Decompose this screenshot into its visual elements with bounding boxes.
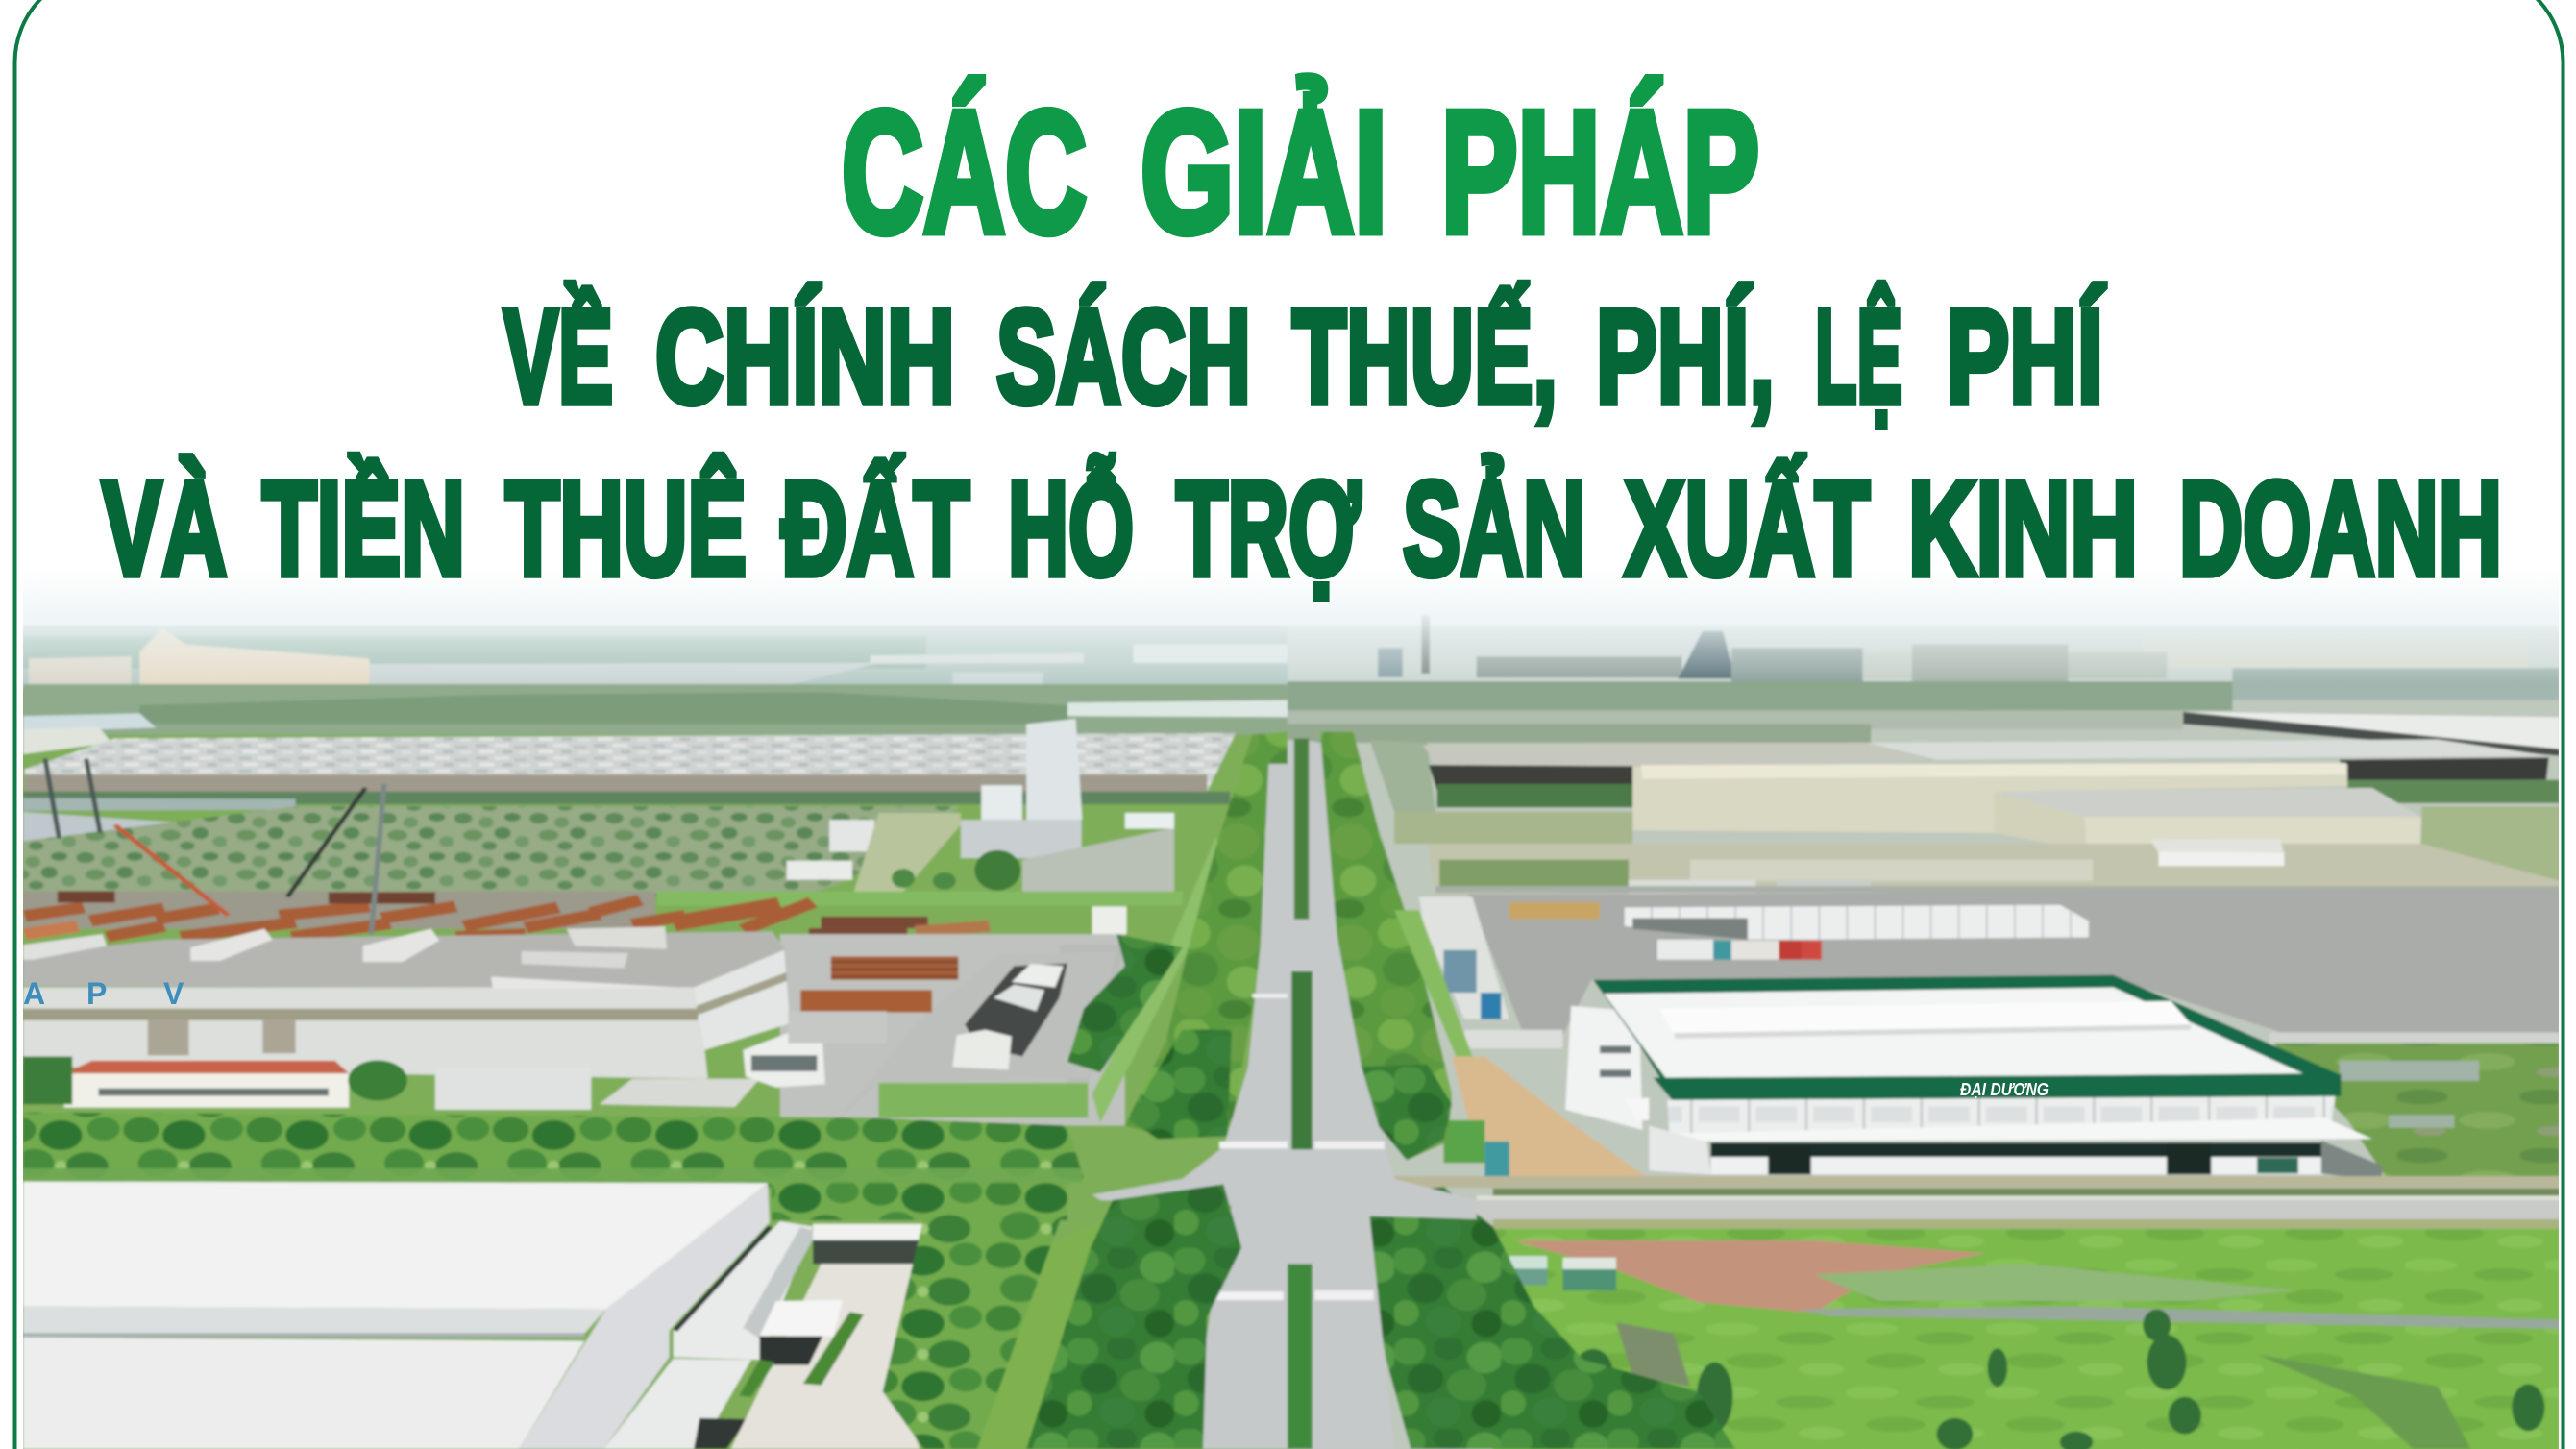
title line 3: VÀ TIỀN THUÊ ĐẤT HỖ TRỢ SẢN XUẤT KINH DOANH: ĐẤT (781, 454, 969, 603)
road (1092, 764, 1288, 1449)
haze fade into white header (23, 613, 2559, 677)
title line 2: VỀ CHÍNH SÁCH THUẾ, PHÍ, LỆ PHÍ: VỀ (503, 282, 613, 431)
title line 2: VỀ CHÍNH SÁCH THUẾ, PHÍ, LỆ PHÍ: CHÍNH (655, 282, 955, 431)
title line 2: VỀ CHÍNH SÁCH THUẾ, PHÍ, LỆ PHÍ (503, 282, 2105, 431)
far dark warehouses (1423, 712, 2560, 807)
photo right half: plants, yard and warehouse (1288, 615, 2576, 1449)
photo left half: factories, pipe yard and boulevard (0, 626, 1288, 1449)
stacked white containers (1625, 905, 2089, 960)
title line 3: VÀ TIỀN THUÊ ĐẤT HỖ TRỢ SẢN XUẤT KINH DOANH: KINH (1908, 454, 2138, 603)
title line 3: VÀ TIỀN THUÊ ĐẤT HỖ TRỢ SẢN XUẤT KINH DOANH (102, 454, 2502, 603)
title line 1: CÁC GIẢI PHÁP: GIẢI (1141, 76, 1387, 269)
title line 2: VỀ CHÍNH SÁCH THUẾ, PHÍ, LỆ PHÍ: SÁCH (996, 282, 1251, 431)
aerial photo of industrial park (0, 567, 2576, 1449)
title line 2: VỀ CHÍNH SÁCH THUẾ, PHÍ, LỆ PHÍ: PHÍ, (1596, 282, 1775, 431)
warehouse with green fascia (1565, 975, 2382, 1182)
green strip and trees along boulevard (1092, 839, 1232, 1123)
pipe stacks (25, 896, 990, 944)
striped canopy (600, 1079, 760, 1107)
warehouse brand name: ĐẠI DƯƠNG (1960, 1080, 2049, 1099)
title block (102, 76, 2502, 603)
distant steel plant (1378, 615, 2560, 700)
APV factory building (23, 926, 790, 1079)
title line 1: CÁC GIẢI PHÁP: PHÁP (1441, 76, 1759, 269)
horizontal access road (1477, 1200, 2560, 1219)
factory wall lettering: P (86, 976, 107, 1011)
scattered young trees (1574, 1309, 2544, 1449)
title line 3: VÀ TIỀN THUÊ ĐẤT HỖ TRỢ SẢN XUẤT KINH DOANH: XUẤT (1625, 454, 1870, 603)
grass field and pond (1493, 1229, 2560, 1449)
title line 3: VÀ TIỀN THUÊ ĐẤT HỖ TRỢ SẢN XUẤT KINH DOANH: TRỢ (1176, 454, 1361, 603)
title line 1: CÁC GIẢI PHÁP (842, 76, 1759, 269)
palm and tree rows (23, 1113, 1084, 1190)
title line 2: VỀ CHÍNH SÁCH THUẾ, PHÍ, LỆ PHÍ: LỆ (1815, 282, 1902, 431)
big white warehouse (23, 1182, 817, 1449)
concrete yard (1468, 891, 2560, 1035)
factory wall lettering: A (23, 976, 45, 1011)
beige factory (1632, 763, 2421, 850)
soft photo layer (0, 615, 2576, 1449)
title line 3: VÀ TIỀN THUÊ ĐẤT HỖ TRỢ SẢN XUẤT KINH DOANH: TIỀN (262, 454, 465, 603)
title line 3: VÀ TIỀN THUÊ ĐẤT HỖ TRỢ SẢN XUẤT KINH DOANH: THUÊ (505, 454, 747, 603)
title line 3: VÀ TIỀN THUÊ ĐẤT HỖ TRỢ SẢN XUẤT KINH DOANH: VÀ (102, 454, 227, 603)
title line 3: VÀ TIỀN THUÊ ĐẤT HỖ TRỢ SẢN XUẤT KINH DOANH: HỖ (1008, 454, 1134, 603)
title line 2: VỀ CHÍNH SÁCH THUẾ, PHÍ, LỆ PHÍ: THUẾ, (1292, 282, 1558, 431)
factory wall lettering (23, 982, 184, 1004)
tree belts (1362, 1187, 1735, 1449)
small white office (2150, 839, 2284, 866)
marsh beside warehouse (2273, 1044, 2560, 1182)
title line 2: VỀ CHÍNH SÁCH THUẾ, PHÍ, LỆ PHÍ: PHÍ (1947, 282, 2105, 431)
title line 3: VÀ TIỀN THUÊ ĐẤT HỖ TRỢ SẢN XUẤT KINH DOANH: SẢN (1403, 454, 1585, 603)
title line 1: CÁC GIẢI PHÁP: CÁC (842, 76, 1087, 269)
low office with red roof (64, 1061, 349, 1108)
cranes (45, 758, 384, 934)
factory wall lettering: V (163, 976, 184, 1011)
boulevard (1288, 740, 1477, 1449)
